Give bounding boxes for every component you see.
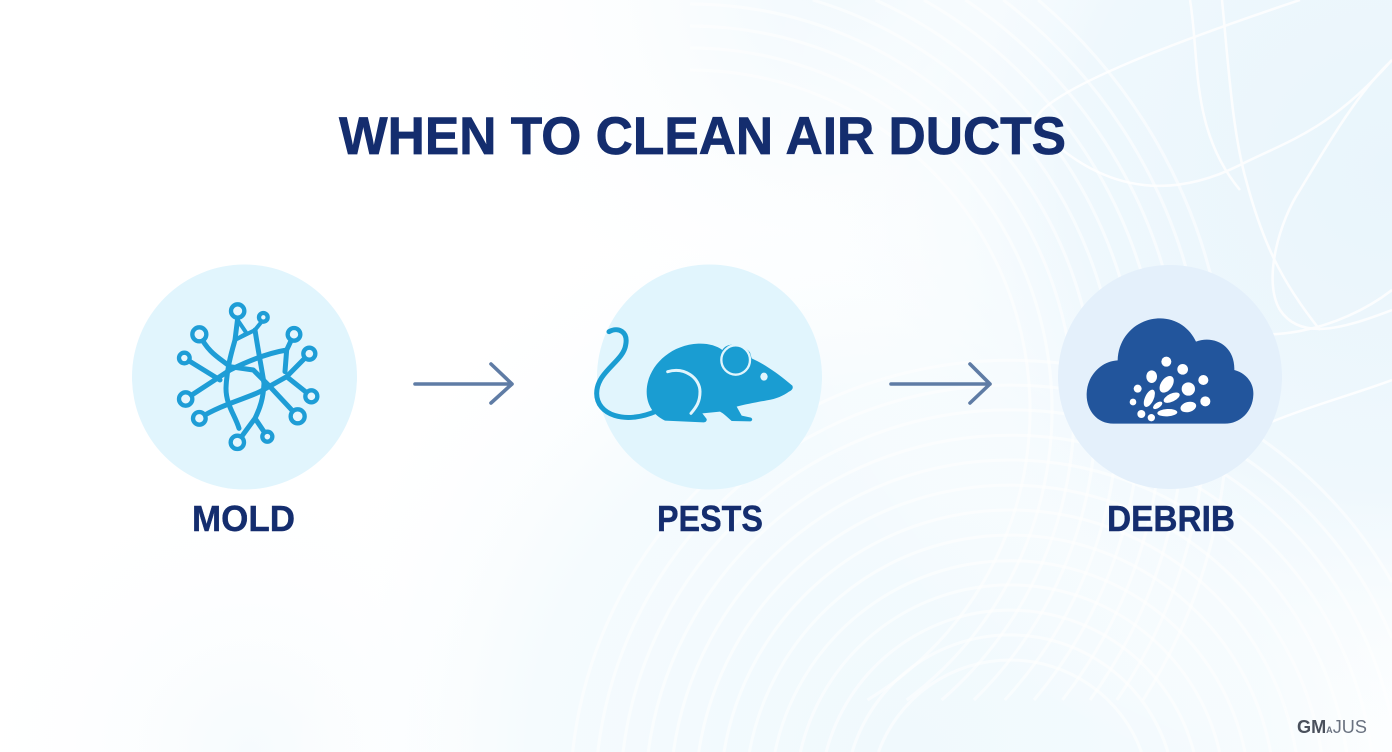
arrow: pests to debris (891, 364, 990, 403)
watermark logo: GMAJUS (1297, 717, 1367, 737)
step: mold (132, 264, 357, 539)
debris circle background (1058, 265, 1282, 489)
label: mold: MOLD (192, 498, 295, 539)
mold circle background (132, 264, 357, 490)
label: debris: DEBRIB (1107, 498, 1235, 539)
pests circle background (597, 264, 822, 490)
step: debris (1058, 265, 1282, 539)
step: pests (597, 264, 822, 539)
label: pests: PESTS (657, 498, 763, 539)
icon: mold network (179, 304, 317, 449)
icon: debris cloud (1087, 318, 1253, 424)
icon: mouse (597, 330, 793, 422)
title: WHEN TO CLEAN AIR DUCTS (339, 107, 1066, 166)
arrow: mold to pests (415, 364, 512, 403)
